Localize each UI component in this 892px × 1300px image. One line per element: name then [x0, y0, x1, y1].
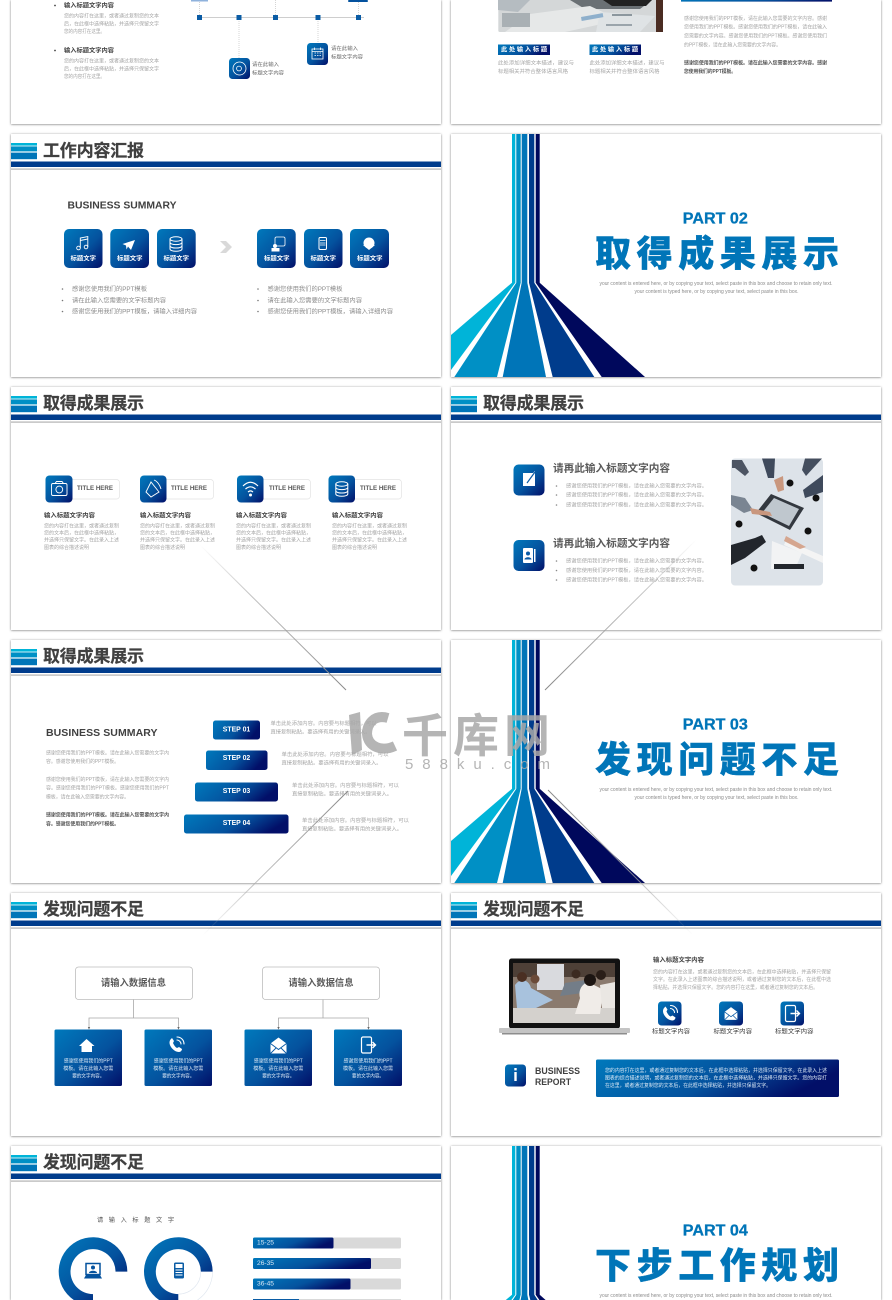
label: business report: BUSINESS	[535, 1066, 580, 1076]
arrow: chevron	[220, 241, 232, 253]
icon tile: presenter: 标题文字	[264, 254, 290, 262]
step 02: STEP 02	[223, 755, 250, 762]
text block: item one	[553, 462, 707, 508]
text block: bullet two: 您的内容打在这里。	[64, 72, 105, 80]
text block: summary: BUSINESS SUMMARY	[46, 727, 158, 739]
connectors	[88, 1000, 370, 1030]
text block: bullet two: 输入标题文字内容	[64, 46, 114, 54]
slide: issues hierarchy	[11, 893, 441, 1136]
box: data info right	[262, 967, 380, 1000]
card: speaker: 并选择只保留文字。在此录入上述	[140, 535, 215, 543]
list: left: 请在此输入您需要的文字标题内容	[72, 297, 166, 305]
list: left: 感谢您使用我们的PPT模板	[72, 285, 147, 293]
slide: issues business report	[451, 893, 881, 1136]
step 04: 单击此处添加内容。内容要与标题相符，可以	[302, 816, 409, 824]
text block: intro	[653, 956, 831, 991]
header bar	[11, 396, 441, 423]
slide: results four cards	[11, 387, 441, 630]
part number: PART 02	[683, 210, 748, 228]
card: database: 输入标题文字内容	[332, 512, 383, 520]
label: input title one: 此处输入标题	[501, 45, 548, 53]
section caption: your content is entered here, or by copying your text, select paste in this box and choose to retain only text.	[600, 1293, 832, 1299]
text block: paragraph	[684, 14, 828, 75]
bar: 26-35	[253, 1258, 401, 1269]
label: timeline item one: 标题文字内容	[252, 68, 284, 76]
slide: step pyramid	[11, 640, 441, 883]
text block: item two: 感谢您使用我们的PPT模板，请在此输入您需要的文字内容。	[566, 556, 707, 564]
icon: note edit	[514, 464, 544, 496]
icon: calendar	[307, 43, 328, 65]
bar: 26-35: 26-35	[257, 1261, 275, 1267]
text block: intro: 文字。在此录入上述图表的综合描述说明，或者通过复制您的文本后，在此框中选	[653, 975, 831, 983]
graphic: converging stripes	[506, 1146, 546, 1300]
icon: mobile tile	[775, 1002, 814, 1036]
card: telephone: 模板。请在此输入您需	[153, 1064, 203, 1072]
text block: summary: 容。感谢您使用我们的PPT模板。	[46, 757, 119, 765]
list: left: 感谢您使用我们的PPT模板，请输入详细内容	[72, 308, 197, 316]
label: input title two: 此处输入标题	[592, 45, 639, 53]
card: telephone	[144, 1030, 212, 1086]
box: data info left	[76, 967, 192, 1000]
laptop with team photo	[499, 958, 630, 1034]
section title: 取得成果展示	[595, 225, 839, 277]
slide: work report summary	[11, 134, 441, 377]
callout: report text: 您的内容打在这里，或者通过复制您的文本后，在此框中选择粘贴，并选择只保留文字。在此录入上述	[605, 1066, 827, 1074]
card: camera: 图表的综合描述说明	[44, 543, 89, 551]
slide: top-right continuation	[451, 0, 881, 124]
card: wifi	[236, 476, 311, 551]
text block: summary: 感谢您使用我们的PPT模板。请在此输入您需要的文字内	[46, 810, 169, 818]
text block: paragraph: 您使用我们的PPT模板。感谢您使用我们的PPT模板，请在此输入	[684, 22, 827, 30]
callout: report text	[596, 1060, 839, 1097]
card: wifi: 您的内容打在这里，或者通过复制	[236, 521, 311, 529]
text block: summary: 模板，请在此输入您需要的文字内容。	[46, 792, 129, 800]
text block: bullet two	[54, 46, 159, 80]
header bar	[11, 902, 441, 929]
icon: info tile	[505, 1064, 526, 1086]
part number: PART 03	[683, 716, 748, 734]
header bar	[451, 396, 881, 423]
label: business report: REPORT	[535, 1077, 571, 1087]
donut chart: two	[144, 1237, 213, 1300]
header bar	[11, 1155, 441, 1182]
card: database: TITLE HERE	[360, 486, 396, 492]
card: home: 模板。请在此输入您需	[63, 1064, 113, 1072]
subheading: BUSINESS SUMMARY	[68, 200, 176, 212]
card: mail: 模板。请在此输入您需	[253, 1064, 303, 1072]
card: home: 感谢您使用我们的PPT	[64, 1056, 114, 1064]
label: timeline item one	[252, 60, 284, 76]
text block: paragraph: 感谢您使用我们的PPT模板。请在此输入您需要的文字内容。感谢	[684, 58, 828, 66]
list: left	[62, 285, 197, 316]
icon: disc	[229, 58, 250, 79]
bar: fourth	[253, 1299, 401, 1300]
icon: phone tile: 标题文字内容	[652, 1028, 690, 1036]
slide: issues charts	[11, 1146, 441, 1300]
text block: intro: 输入标题文字内容	[653, 956, 704, 964]
card: database: 您的内容打在这里，或者通过复制	[332, 521, 407, 529]
card: wifi: 您的文本后，在此框中选择粘贴，	[236, 528, 311, 536]
graphic: converging stripes	[451, 134, 645, 377]
card: speaker: 您的文本后，在此框中选择粘贴，	[140, 528, 215, 536]
card: mobile: 模板。请在此输入您需	[343, 1064, 393, 1072]
step 04: 直接复制粘贴。要选择有用的关键词录入。	[302, 824, 402, 832]
card: database: 您的文本后，在此框中选择粘贴，	[332, 528, 407, 536]
card: wifi: 图表的综合描述说明	[236, 543, 281, 551]
bar: 36-45	[253, 1278, 401, 1290]
text block: bullet one: 输入标题文字内容	[64, 2, 114, 10]
photo: meeting overhead	[731, 458, 823, 586]
text block: summary: 感谢您使用我们的PPT模板。请在此输入您需要的文字内	[46, 748, 169, 756]
slide: part 04 section	[451, 1146, 881, 1300]
text block: paragraph: 您使用我们的PPT模板。	[684, 67, 736, 75]
icon tile: phone: 标题文字	[310, 254, 336, 262]
label: input title one	[498, 44, 550, 55]
text block: description one: 标题相关并符合整体语言风格	[498, 67, 569, 75]
step 04	[184, 814, 409, 834]
icon: mail tile: 标题文字内容	[714, 1028, 752, 1036]
icon: mail tile	[714, 1002, 752, 1036]
label: timeline item one: 请在此输入	[252, 60, 279, 68]
label: timeline item two	[331, 44, 363, 60]
text block: summary: 容。感谢您使用我们的PPT模板。感谢您使用我们的PPT	[46, 783, 170, 791]
icon: mobile tile: 标题文字内容	[775, 1028, 814, 1036]
text block: description two: 标题相关并符合整体语言风格	[590, 67, 660, 75]
list: right: 感谢您使用我们的PPT模板	[268, 285, 342, 293]
heading: 取得成果展示	[43, 642, 144, 667]
card: wifi: 输入标题文字内容	[236, 512, 287, 520]
text block: bullet one: 您的内容打在这里，或者通过复制您的文本	[64, 11, 159, 19]
text block: item one: 感谢您使用我们的PPT模板，请在此输入您需要的文字内容。	[566, 500, 707, 508]
slide: results with photo	[451, 387, 881, 630]
card: camera: 您的文本后，在此框中选择粘贴，	[44, 528, 119, 536]
card: database: 并选择只保留文字。在此录入上述	[332, 535, 407, 543]
heading: 取得成果展示	[43, 389, 144, 414]
step 04: STEP 04	[223, 820, 250, 827]
card: camera: 并选择只保留文字。在此录入上述	[44, 535, 119, 543]
list: right: 请在此输入您需要的文字标题内容	[268, 297, 362, 305]
header bar	[451, 902, 881, 929]
step 02: 直接复制粘贴。要选择有用的关键词录入。	[282, 758, 382, 766]
label: business report	[535, 1066, 580, 1087]
box: data info left: 请输入数据信息	[101, 977, 166, 989]
text block: item two	[553, 537, 707, 583]
label: timeline item two: 标题文字内容	[331, 52, 363, 60]
text block: paragraph: 的PPT模板，请在此输入您需要的文字内容。	[684, 40, 781, 48]
heading: 取得成果展示	[483, 389, 584, 414]
step 01: STEP 01	[223, 726, 250, 734]
callout: report text: 图表的综合描述说明，或者通过复制您的文本后，在此框中选择粘贴，并选择只保留文字。您的内容打	[605, 1073, 827, 1081]
slide: top-left continuation	[11, 0, 441, 124]
icon tile: phone	[304, 229, 342, 268]
step 02: 单击此处添加内容。内容要与标题相符，可以	[282, 750, 388, 758]
text block: item two: 请再此输入标题文字内容	[553, 537, 671, 550]
step 01: 直接复制粘贴。要选择有用的关键词录入。	[270, 727, 370, 735]
text block: paragraph: 感谢您使用我们的PPT模板，请在此输入您需要的文字内容。感谢	[684, 14, 827, 22]
watermark: 588ku: 千库网	[402, 700, 550, 766]
card: speaker: 图表的综合描述说明	[140, 543, 185, 551]
bar: 36-45: 36-45	[257, 1281, 275, 1287]
card: camera	[44, 476, 120, 551]
text block: bullet one: 后，在此框中选择粘贴，并选择只保留文字	[64, 19, 159, 27]
text block: description one	[498, 58, 574, 75]
decorative title bar base	[681, 0, 832, 2]
step 01: 单击此处添加内容。内容要与标题相符，可以	[270, 719, 376, 727]
heading: 发现问题不足	[483, 895, 584, 920]
icon tile: paper plane: 标题文字	[117, 254, 142, 262]
label: input title two	[590, 44, 641, 55]
list: right: 感谢您使用我们的PPT模板，请输入详细内容	[268, 308, 393, 316]
section caption	[600, 787, 832, 801]
icon tile: headset: 标题文字	[357, 254, 382, 262]
text block: paragraph: 您需要的文字内容。感谢您使用我们的PPT模板。感谢您使用我们	[684, 31, 827, 39]
text block: intro: 择粘贴，并选择只保留文字。您的内容打在这里，或者通过复制您的文本后。	[653, 983, 818, 991]
text block: item two: 感谢您使用我们的PPT模板，请在此输入您需要的文字内容。	[566, 575, 707, 583]
card: camera: 输入标题文字内容	[44, 512, 95, 520]
card: mobile: 感谢您使用我们的PPT	[344, 1056, 393, 1064]
donut chart: one	[59, 1237, 127, 1300]
heading: 工作内容汇报	[43, 136, 144, 161]
text block: summary: 容。感谢您使用我们的PPT模板。	[46, 819, 119, 827]
card: camera: TITLE HERE	[77, 486, 113, 492]
icon tile: music	[64, 229, 102, 268]
text block: description one: 此处添加详细文本描述，建议与	[498, 58, 574, 66]
card: database	[328, 476, 407, 551]
box: data info right: 请输入数据信息	[288, 977, 354, 989]
step 03: STEP 03	[223, 788, 250, 795]
slide: part 02 section	[451, 134, 881, 377]
card: mail	[244, 1030, 312, 1086]
step 03: 直接复制粘贴。要选择有用的关键词录入。	[292, 789, 392, 797]
text block: item two: 感谢您使用我们的PPT模板，请在此输入您需要的文字内容。	[566, 566, 707, 574]
header bar	[11, 649, 441, 676]
photo: blueprints on desk	[498, 0, 663, 32]
header bar	[11, 143, 441, 170]
card: wifi: TITLE HERE	[269, 486, 305, 492]
icon tile: music: 标题文字	[70, 254, 96, 262]
icon tile: database: 标题文字	[164, 254, 189, 262]
card: wifi: 并选择只保留文字。在此录入上述	[236, 535, 311, 543]
label: timeline item two: 请在此输入	[331, 44, 358, 52]
slide: part 03 section	[451, 640, 881, 883]
section caption: your content is entered here, or by copying your text, select paste in this box and choose to retain only text.	[600, 281, 832, 287]
text block: description two	[590, 58, 664, 75]
section title: 发现问题不足	[595, 731, 839, 783]
icon tile: presenter	[257, 229, 296, 268]
part number: PART 04	[683, 1222, 748, 1240]
card: speaker: TITLE HERE	[171, 486, 207, 492]
card: home	[54, 1030, 122, 1086]
text block: item one: 感谢您使用我们的PPT模板，请在此输入您需要的文字内容。	[566, 481, 707, 489]
section title: 下步工作规划	[595, 1237, 839, 1289]
text block: bullet one	[54, 2, 159, 35]
card: database: 图表的综合描述说明	[332, 543, 377, 551]
card: camera: 您的内容打在这里，或者通过复制	[44, 521, 119, 529]
step 01	[213, 719, 376, 740]
section caption	[600, 281, 832, 295]
bar: 15-25: 15-25	[257, 1240, 275, 1246]
text block: summary	[46, 727, 170, 827]
step 03: 单击此处添加内容。内容要与标题相符，可以	[292, 781, 399, 789]
heading: 发现问题不足	[43, 1148, 144, 1173]
icon tile: paper plane	[110, 229, 149, 268]
card: mail: 要的文字内容。	[262, 1071, 294, 1079]
card: speaker	[140, 476, 215, 551]
card: speaker: 输入标题文字内容	[140, 512, 191, 520]
text block: intro: 您的内容打在这里，或者通过复制您的文本后，在此框中选择粘贴，并选择只保留	[653, 967, 831, 975]
text block: bullet one: 您的内容打在这里。	[64, 27, 105, 35]
list: right	[257, 285, 393, 316]
watermark: 588ku: 588ku.com	[405, 756, 550, 773]
text block: bullet two: 您的内容打在这里，或者通过复制您的文本	[64, 56, 159, 64]
text block: item one: 感谢您使用我们的PPT模板，请在此输入您需要的文字内容。	[566, 490, 707, 498]
text block: summary: 感谢您使用我们的PPT模板，请在此输入您需要的文字内	[46, 775, 169, 783]
icon: phone tile	[652, 1002, 690, 1036]
section caption: your content is typed here, or by copying your text, select paste in this box.	[634, 795, 798, 801]
card: speaker: 您的内容打在这里，或者通过复制	[140, 521, 215, 529]
card: mobile	[334, 1030, 402, 1086]
card: home: 要的文字内容。	[72, 1071, 104, 1079]
timeline chart	[191, 0, 368, 79]
section caption: your content is typed here, or by copying your text, select paste in this box.	[634, 289, 798, 295]
bar chart	[253, 1238, 401, 1300]
card: mail: 感谢您使用我们的PPT	[254, 1056, 304, 1064]
heading: 发现问题不足	[43, 895, 144, 920]
card: mobile: 要的文字内容。	[352, 1071, 384, 1079]
section caption: your content is entered here, or by copying your text, select paste in this box and choose to retain only text.	[600, 787, 832, 793]
icon: contact book	[514, 540, 544, 571]
icon tile: database	[157, 229, 196, 268]
graphic: converging stripes	[451, 640, 645, 883]
chart title: 请输入标题文字	[97, 1216, 174, 1224]
icon tile: headset	[350, 229, 389, 268]
bar: 15-25	[253, 1238, 401, 1248]
step 03	[195, 781, 399, 802]
card: telephone: 要的文字内容。	[162, 1071, 194, 1079]
card: telephone: 感谢您使用我们的PPT	[154, 1056, 204, 1064]
callout: report text: 在这里，或者通过复制您的文本后，在此框中选择粘贴，并选择只保留文字。	[605, 1081, 771, 1089]
step 02	[206, 750, 388, 770]
watermark: 588ku	[200, 540, 696, 935]
text block: item one: 请再此输入标题文字内容	[553, 462, 671, 475]
text block: description two: 此处添加详细文本描述，建议与	[590, 58, 664, 66]
text block: bullet two: 后，在此框中选择粘贴，并选择只保留文字	[64, 64, 159, 72]
